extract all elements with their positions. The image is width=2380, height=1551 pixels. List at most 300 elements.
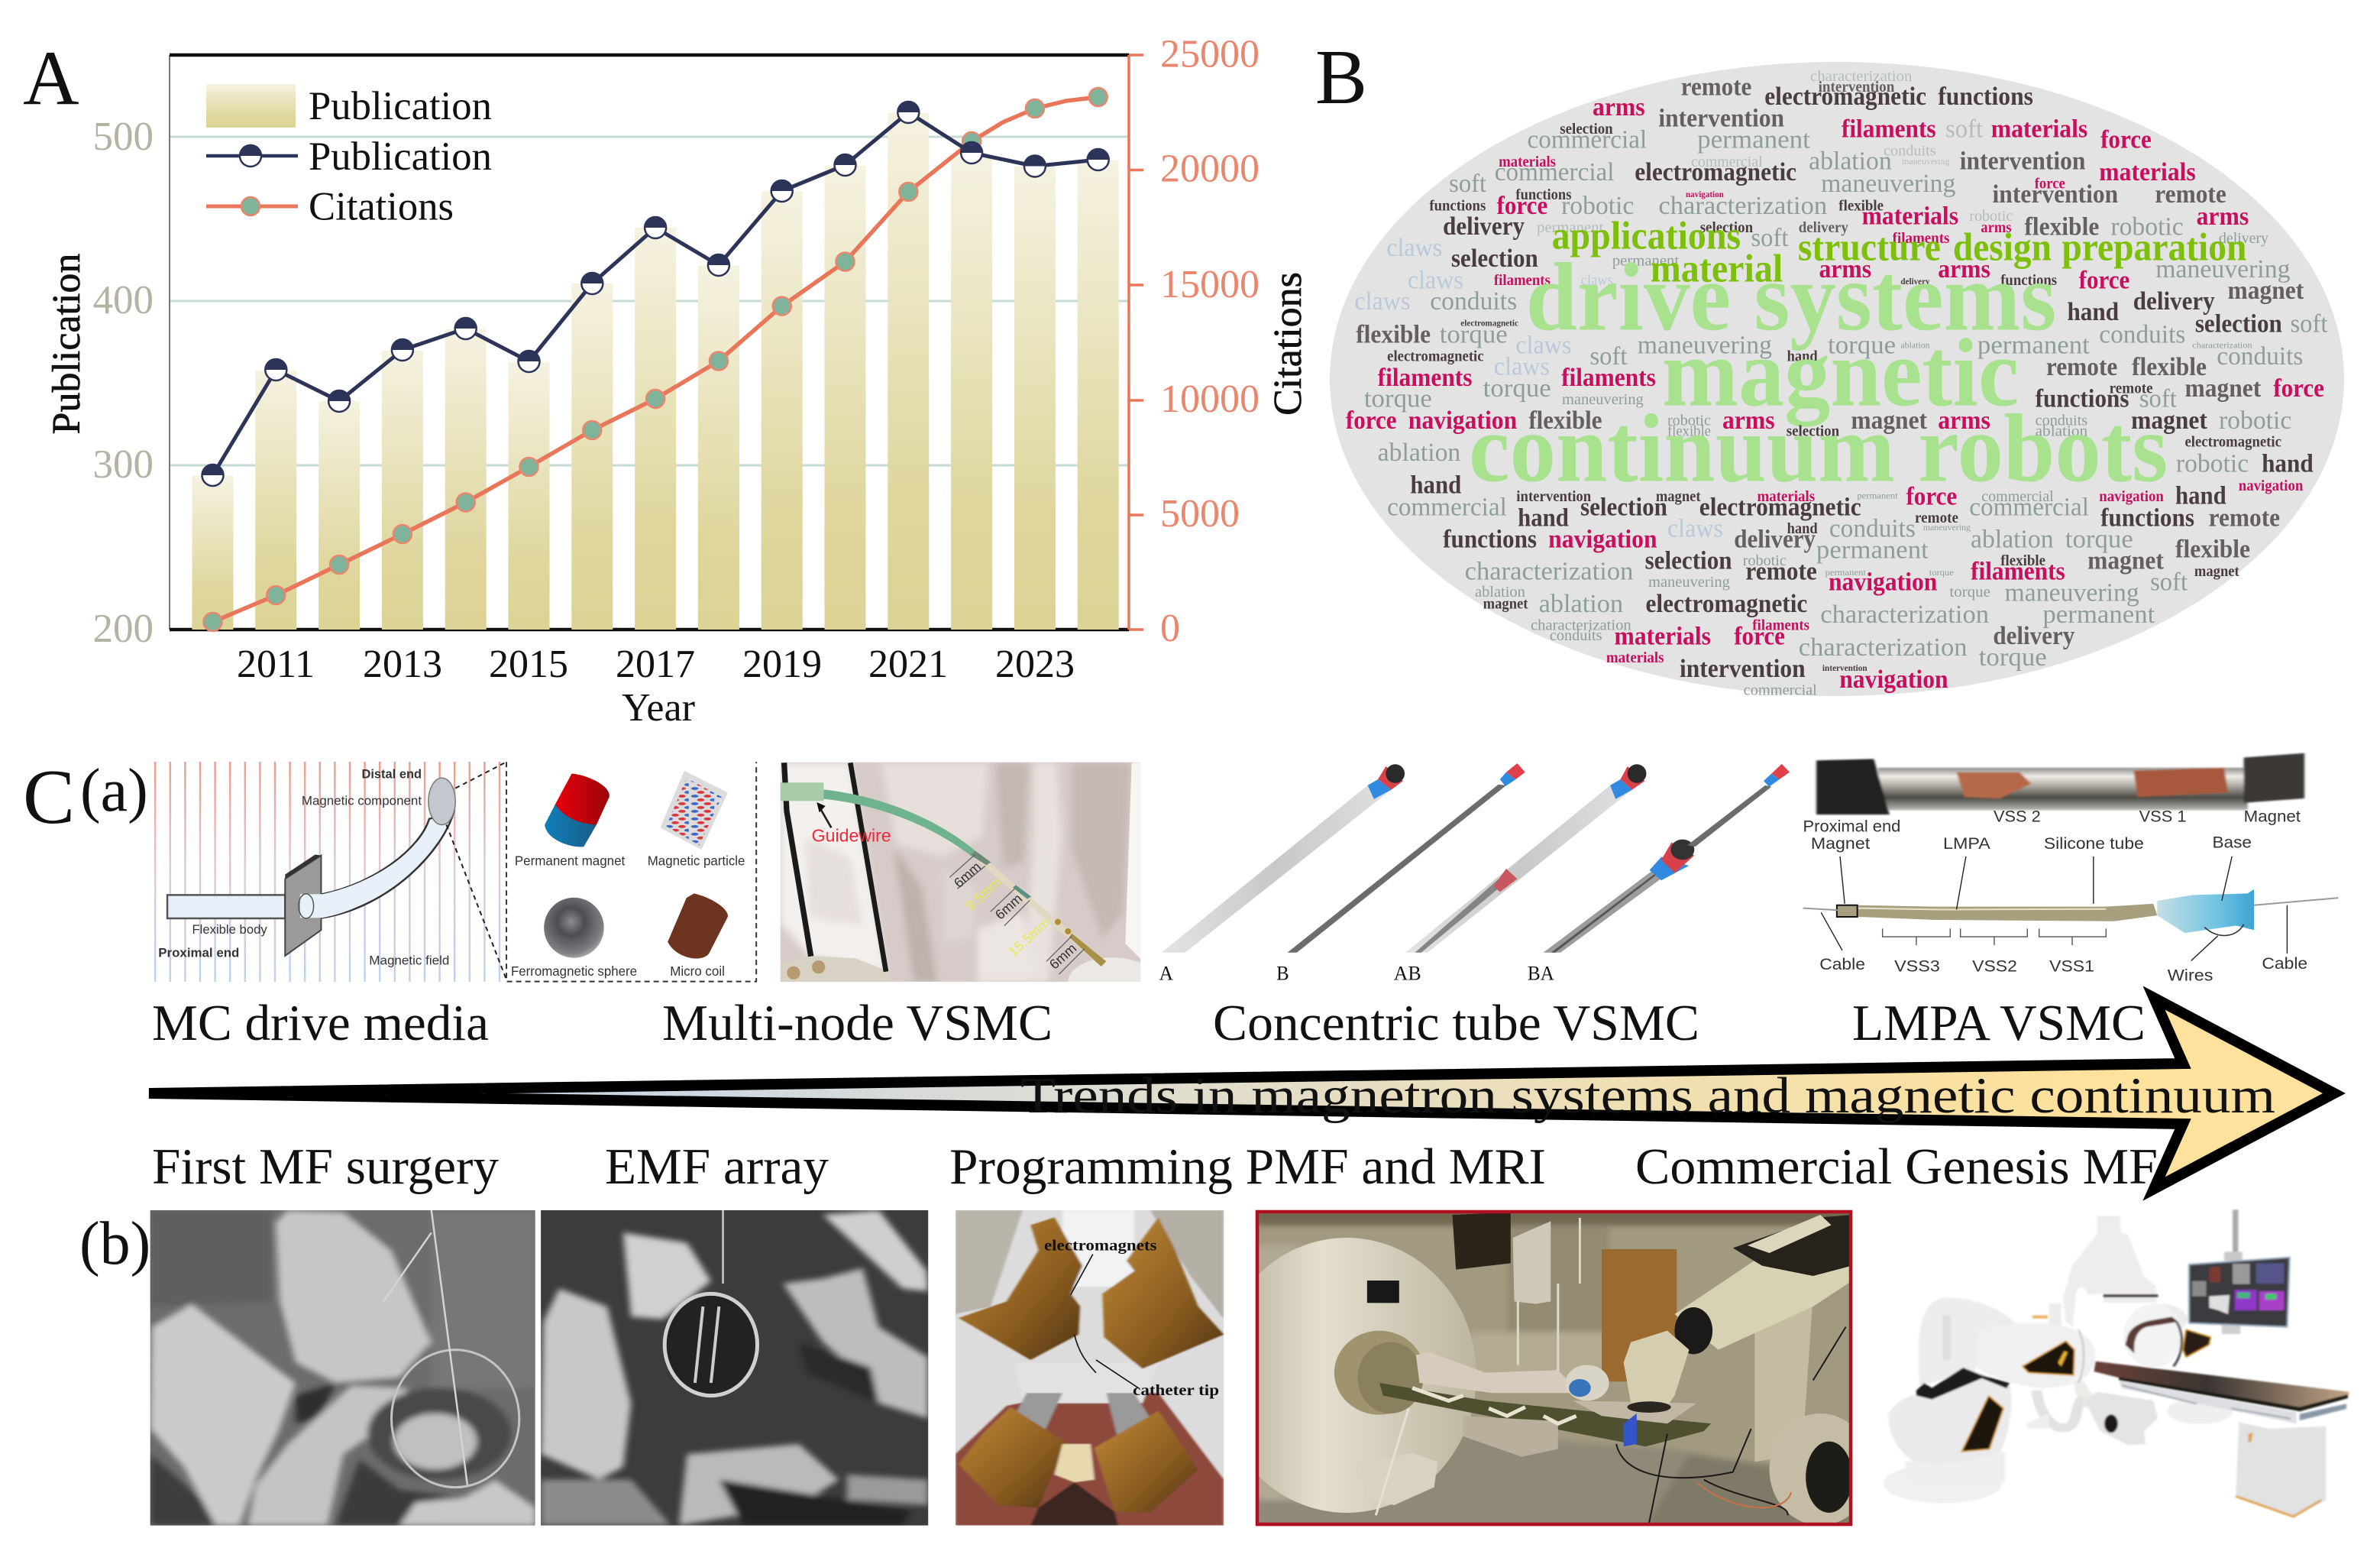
diagram: magnetic continuum drive media: Flexible body (192, 921, 267, 936)
word cloud words: arms (1819, 254, 1871, 283)
x axis year labels: 2023 (995, 643, 1075, 686)
word cloud words: torque (1440, 319, 1508, 348)
line series: citations (203, 88, 1108, 631)
tube B (1288, 763, 1525, 953)
word cloud words: permanent (2042, 600, 2155, 628)
word cloud words: robotic (1743, 552, 1787, 569)
legend (206, 84, 492, 229)
word cloud words: remote (2209, 503, 2280, 532)
word cloud words: functions (1443, 524, 1537, 553)
word cloud words: intervention (1822, 663, 1867, 673)
word cloud words: commercial (1981, 487, 2054, 505)
word cloud words: hand (1410, 470, 1461, 499)
word cloud words: selection (1580, 492, 1667, 521)
word cloud words: robotic (2219, 406, 2291, 435)
word cloud words: robotic (2110, 212, 2184, 241)
inset: magnetic media types: Micro coil (670, 964, 725, 979)
word cloud words: navigation (2099, 487, 2164, 505)
word cloud words: force (2035, 174, 2065, 192)
word cloud words: maneuvering (1562, 390, 1644, 408)
photo: electromagnet array surgery (541, 1210, 928, 1526)
photo and diagram: LMPA variable stiffness catheter: Cable (1819, 955, 1865, 973)
grid lines and axes frame (170, 55, 1129, 630)
word cloud words: maneuvering (1648, 573, 1730, 591)
word cloud words: characterization (1531, 616, 1631, 633)
word cloud words: claws (1408, 265, 1463, 294)
word cloud words: materials (1606, 649, 1664, 666)
word cloud words: claws (1386, 233, 1442, 262)
word cloud words: navigation (1686, 189, 1724, 199)
stage labels: bottom row: Programming PMF and MRI (949, 1138, 1546, 1195)
word cloud words: filaments (1752, 616, 1809, 633)
word cloud words: flexible (1356, 319, 1431, 348)
photo: multi-node guidewire (781, 763, 1141, 982)
word cloud words: selection (1787, 423, 1839, 439)
word cloud words: navigation (1408, 406, 1517, 435)
word cloud words: electromagnetic (2184, 433, 2281, 450)
icon: magnetic particle sheet (660, 771, 728, 850)
word cloud words: navigation (1829, 568, 1938, 596)
panel B: word cloud (1330, 62, 2344, 698)
word cloud words: maneuvering (1902, 157, 1950, 167)
head (1975, 1323, 2096, 1388)
stage labels: bottom row: EMF array (605, 1138, 829, 1195)
word cloud words: robotic (2176, 448, 2249, 478)
word cloud words: delivery (2219, 229, 2268, 247)
photo frame (1257, 1212, 1851, 1524)
bar chart: yearly publications (192, 113, 1119, 630)
word cloud words: magnet (2184, 374, 2261, 403)
word cloud words: materials (1615, 621, 1711, 650)
floor base (1884, 1464, 2002, 1504)
word cloud words: electromagnetic (1635, 157, 1796, 186)
word cloud words: permanent (1816, 535, 1929, 564)
word cloud words: functions (1429, 196, 1486, 214)
photo and diagram: LMPA variable stiffness catheter (1803, 753, 2338, 984)
photo and diagram: LMPA variable stiffness catheter: Magnet (1811, 834, 1870, 853)
photo and diagram: LMPA variable stiffness catheter: VSS 2 (1994, 808, 2041, 826)
drum under table (2167, 1397, 2233, 1424)
word cloud words: hand (2175, 481, 2226, 510)
back ring of left arm (1919, 1297, 2016, 1385)
word cloud words: design (1953, 225, 2052, 269)
monitor (2233, 1209, 2238, 1253)
icon: ferromagnetic sphere (544, 898, 604, 958)
x axis year labels: 2013 (363, 643, 442, 686)
word cloud words: arms (1593, 92, 1645, 121)
legend: Publication (309, 84, 492, 128)
word cloud words: remote (2110, 379, 2153, 397)
photo: LMPA close-up (1816, 753, 2304, 814)
word cloud words: permanent (1697, 125, 1810, 154)
diagram: LMPA catheter with hub (1803, 856, 2338, 960)
word cloud words: conduits (2099, 319, 2185, 348)
word cloud words: torque (1979, 643, 2047, 671)
sub-panel label (b): (b) (79, 1210, 150, 1277)
word cloud words: preparation (2061, 225, 2246, 269)
panel letter B: B (1315, 34, 1367, 121)
word cloud words: permanent (1977, 330, 2090, 359)
x axis year labels: 2015 (489, 643, 568, 686)
pedestal (2236, 1423, 2326, 1517)
y axis title: citations: Citations (1266, 272, 1310, 416)
word cloud words: characterization (1658, 191, 1827, 220)
word cloud words: robotic (1969, 207, 2013, 224)
stage labels: bottom row: First MF surgery (152, 1138, 500, 1195)
right axis: citations (1129, 32, 1260, 650)
word cloud words: claws (1515, 330, 1571, 359)
word cloud words: force (1906, 481, 1957, 510)
word cloud words: selection (1645, 546, 1732, 575)
word cloud words: hand (2262, 448, 2314, 478)
word cloud words: navigation (2239, 477, 2303, 494)
panel letter C: C (23, 754, 75, 840)
word cloud words: maneuvering (1821, 169, 1955, 197)
word cloud words: flexible (1528, 406, 1602, 435)
photo and diagram: LMPA variable stiffness catheter: VSS3 (1894, 957, 1940, 976)
photo: MRI room with robot arm (1217, 1210, 1871, 1526)
left axis tick labels: 500 (93, 115, 154, 159)
word cloud words: intervention (1680, 654, 1806, 683)
legend: Citations (309, 185, 454, 229)
arrow title: Trends in magnetron systems and magnetic continuum (1020, 1067, 2275, 1124)
word cloud words: magnet (2228, 276, 2304, 305)
word cloud words: maneuvering (1923, 523, 1971, 533)
word cloud words: torque (1483, 374, 1551, 403)
word cloud words: conduits (2036, 412, 2087, 429)
word cloud words: remote (1745, 557, 1817, 585)
word cloud words: maneuvering (2005, 578, 2139, 607)
measurement labels on guidewire: 6mm (951, 859, 984, 891)
word cloud words: selection (1700, 219, 1753, 236)
word cloud words: characterization (1799, 633, 1968, 662)
word cloud words: conduits (1829, 513, 1916, 542)
x axis year labels: 2021 (868, 643, 948, 686)
word cloud words: intervention (1819, 78, 1894, 96)
word cloud words: force (1734, 621, 1785, 650)
word cloud words: intervention (1658, 103, 1784, 132)
x axis year labels: 2011 (237, 643, 315, 686)
left axis tick labels: 200 (93, 607, 154, 651)
photo and diagram: LMPA variable stiffness catheter: VSS1 (2049, 957, 2094, 976)
right axis: citations: 25000 (1160, 32, 1260, 76)
photo and diagram: LMPA variable stiffness catheter: LMPA (1943, 834, 1990, 853)
word cloud words: force (2100, 125, 2152, 154)
word cloud words: conduits (2217, 342, 2303, 371)
word cloud words: arms (1938, 406, 1990, 435)
word cloud words: permanent (1537, 219, 1604, 236)
word cloud words: hand (2067, 297, 2119, 326)
right ball (2135, 1304, 2188, 1335)
left axis tick labels (93, 115, 154, 651)
word cloud words: magnetic (1662, 319, 2019, 426)
word cloud words: filaments (1842, 114, 1936, 143)
stage labels: top row: Multi-node VSMC (662, 995, 1053, 1051)
left body (1888, 1370, 2012, 1465)
word cloud words: navigation (1548, 524, 1657, 553)
word cloud words: claws (1667, 513, 1723, 542)
x axis year labels (237, 643, 1075, 686)
table top (2094, 1362, 2349, 1411)
word cloud words: soft (1751, 223, 1789, 252)
word cloud words: ablation (1539, 589, 1623, 617)
word cloud words: ablation (1378, 438, 1460, 467)
word cloud words: soft (2139, 384, 2177, 413)
word cloud words: hand (1787, 347, 1818, 364)
word cloud words: permanent (1857, 491, 1898, 501)
word cloud words: soft (1589, 342, 1628, 371)
word cloud words: torque (1929, 568, 1954, 578)
measurement labels on guidewire: 15.5mm (1005, 915, 1053, 960)
diagram: concentric tubes A, B, AB, BA: BA (1528, 963, 1554, 984)
word cloud words: hand (1787, 520, 1818, 537)
word cloud words: claws (1494, 351, 1550, 380)
measurement labels on guidewire: 9.5mm (962, 874, 1004, 914)
word cloud words: arms (2197, 202, 2249, 231)
stage labels: top row: LMPA VSMC (1852, 995, 2146, 1051)
word cloud words: material (1651, 247, 1783, 290)
word cloud words: permanent (1612, 251, 1680, 269)
word cloud words: claws (1354, 287, 1410, 316)
word cloud words: magnet (2087, 546, 2164, 575)
word cloud words: filaments (1971, 557, 2065, 585)
word cloud words: electromagnetic (1387, 347, 1484, 364)
photo and diagram: LMPA variable stiffness catheter: Proximal end (1803, 818, 1900, 835)
word cloud words: functions (1938, 82, 2033, 110)
tube AB (1405, 764, 1646, 953)
photo and diagram: LMPA variable stiffness catheter: Cable (2262, 954, 2307, 973)
label: guidewire: Guidewire (812, 826, 891, 846)
word cloud words: navigation (1839, 665, 1948, 694)
photo: Genesis MF system (1884, 1209, 2349, 1517)
diagram: magnetic continuum drive media: Magnetic field (369, 953, 449, 967)
word cloud words: materials (1862, 201, 1958, 230)
word cloud words: filaments (1561, 363, 1656, 392)
word cloud words: torque (1828, 330, 1896, 359)
measurement labels on guidewire: 6mm (992, 891, 1025, 922)
stage labels: bottom row (152, 1138, 2158, 1195)
word cloud words: remote (1915, 509, 1958, 526)
photo: electromagnet coil array: electromagnets (1044, 1237, 1156, 1254)
word cloud words: remote (2046, 352, 2117, 381)
diagram: concentric tubes A, B, AB, BA: B (1276, 963, 1289, 984)
word cloud words: soft (1449, 169, 1487, 197)
right axis: citations: 0 (1160, 607, 1180, 650)
word cloud words: commercial (1495, 157, 1615, 186)
word cloud words: materials (1499, 153, 1556, 170)
word cloud words: conduits (1884, 142, 1936, 159)
word cloud words: magnet (1851, 406, 1927, 435)
photo and diagram: LMPA variable stiffness catheter: Base (2212, 834, 2252, 851)
word cloud words: flexible (1838, 196, 1884, 214)
tube BA (1543, 764, 1790, 953)
legend: Publication (309, 134, 492, 179)
stage labels: top row: Concentric tube VSMC (1213, 995, 1699, 1051)
diagram: magnetic continuum drive media: Distal end (361, 766, 422, 781)
word cloud words: ablation (1809, 146, 1892, 175)
word cloud words: ablation (1900, 341, 1930, 351)
word cloud words: soft (2150, 568, 2188, 596)
left axis tick labels: 300 (93, 442, 154, 487)
word cloud words (1346, 67, 2328, 698)
word cloud ellipse background (1330, 62, 2344, 696)
word cloud words: arms (1722, 406, 1775, 435)
word cloud words: magnet (2131, 406, 2207, 435)
word cloud words: materials (1991, 114, 2087, 143)
word cloud words: force (1496, 191, 1547, 220)
word cloud words: intervention (1960, 146, 2086, 175)
word cloud words: hand (1518, 503, 1569, 532)
word cloud words: electromagnetic (1764, 82, 1926, 110)
inset: magnetic media types: Permanent magnet (515, 853, 625, 868)
icon: permanent magnet (545, 774, 610, 847)
word cloud words: commercial (1528, 125, 1647, 154)
word cloud words: selection (1451, 244, 1538, 273)
word cloud words: magnet (1483, 594, 1528, 612)
word cloud words: filaments (1494, 271, 1551, 289)
word cloud words: functions (2100, 503, 2194, 532)
word cloud words: intervention (1993, 180, 2118, 208)
word cloud words: flexible (2000, 552, 2045, 569)
tube A (1162, 764, 1405, 953)
word cloud words: arms (1981, 219, 2011, 236)
word cloud words: ablation (1475, 583, 1525, 601)
word cloud words: commercial (1691, 153, 1763, 170)
word cloud words: characterization (1810, 67, 1912, 85)
diagram: concentric tubes A, B, AB, BA: AB (1394, 963, 1421, 984)
word cloud words: conduits (1550, 627, 1602, 643)
y axis title: publication: Publication (45, 254, 89, 434)
diagram: concentric tubes A, B, AB, BA: A (1159, 963, 1173, 984)
word cloud words: soft (1945, 114, 1983, 143)
photo and diagram: LMPA variable stiffness catheter: VSS 1 (2139, 808, 2186, 826)
center unit (2084, 1392, 2158, 1446)
word cloud words: remote (2155, 180, 2226, 208)
photo: first magnetic surgery (150, 1210, 535, 1526)
word cloud words: maneuvering (1638, 330, 1772, 359)
word cloud words: commercial (1387, 492, 1507, 521)
line series: publications (202, 102, 1109, 486)
word cloud words: flexible (1667, 423, 1711, 439)
word cloud words: force (2273, 374, 2324, 403)
word cloud words: permanent (1825, 568, 1866, 578)
word cloud words: characterization (1820, 600, 1989, 628)
word cloud words: claws (1581, 271, 1613, 289)
inset: magnetic media types: Ferromagnetic sphere (511, 964, 637, 979)
word cloud words: selection (2195, 309, 2282, 338)
word cloud words: intervention (1516, 487, 1591, 505)
word cloud words: delivery (1993, 621, 2074, 649)
word cloud words: torque (1949, 583, 1990, 601)
right axis: citations: 10000 (1160, 377, 1260, 421)
panel A: publication and citation chart (23, 32, 1310, 730)
right axis: citations: 5000 (1160, 492, 1240, 536)
hose (2036, 1391, 2083, 1428)
word cloud words: structure (1798, 225, 1941, 269)
word cloud words: filaments (1893, 229, 1949, 247)
x axis year labels: 2017 (616, 643, 695, 686)
measurement labels on guidewire: 6mm (1046, 941, 1079, 972)
magnetic field background lines (153, 762, 506, 982)
measurement labels on guidewire (951, 859, 1079, 972)
word cloud words: electromagnetic (1699, 492, 1861, 521)
word cloud words: delivery (1734, 524, 1816, 553)
word cloud words: electromagnetic (1460, 319, 1518, 328)
word cloud words: delivery (1799, 219, 1848, 236)
word cloud words: robotic (1667, 412, 1711, 429)
word cloud words: torque (2065, 524, 2133, 553)
word cloud words: functions (2000, 271, 2057, 289)
word cloud words: electromagnetic (1645, 589, 1807, 617)
photo: electromagnet coil array (956, 1210, 1224, 1526)
word cloud words: applications (1552, 213, 1741, 257)
diagram: magnetic continuum drive media (158, 762, 756, 982)
diagram: concentric tubes A, B, AB, BA (1159, 763, 1790, 984)
word cloud words: filaments (1378, 363, 1472, 392)
sub-panel label (a): (a) (80, 757, 148, 824)
word cloud words: magnet (1656, 487, 1701, 505)
word cloud words: functions (1515, 186, 1571, 202)
right axis: citations: 20000 (1160, 147, 1260, 191)
word cloud words: delivery (1443, 212, 1525, 240)
word cloud words: commercial (1744, 682, 1817, 698)
word cloud words: soft (2290, 309, 2328, 338)
word cloud words: delivery (1900, 277, 1930, 287)
word cloud words: conduits (1430, 287, 1517, 316)
inset: magnetic media types (511, 771, 745, 979)
word cloud words: magnet (2194, 562, 2239, 580)
photo and diagram: LMPA variable stiffness catheter: Silicone tube (2044, 834, 2144, 853)
diagram: magnetic continuum drive media: Proximal end (158, 945, 239, 960)
word cloud words: flexible (2175, 534, 2250, 563)
left axis tick labels: 400 (93, 278, 154, 322)
stage labels: top row (152, 995, 2146, 1051)
word cloud words: characterization (1465, 557, 1633, 585)
word cloud words: delivery (2133, 287, 2215, 316)
arrow: trend arrow (149, 998, 2334, 1189)
word cloud words: remote (1681, 72, 1751, 101)
word cloud words: commercial (1969, 492, 2089, 521)
text: Magnetic particle (648, 853, 745, 868)
word cloud words: selection (1560, 120, 1613, 138)
word cloud words: force (1346, 406, 1397, 435)
photo and diagram: LMPA variable stiffness catheter: Wires (2168, 967, 2213, 984)
stage labels: bottom row: Commercial Genesis MF (1635, 1138, 2158, 1195)
panel letter A: A (23, 35, 79, 121)
word cloud words: ablation (2036, 423, 2087, 439)
x axis title: Year (622, 686, 695, 730)
stage labels: top row: MC drive media (152, 995, 489, 1051)
x axis year labels: 2019 (742, 643, 822, 686)
word cloud words: force (2079, 265, 2129, 294)
word cloud words: flexible (2024, 212, 2099, 241)
word cloud words: materials (2099, 157, 2196, 186)
text: catheter tip (1133, 1382, 1219, 1399)
icon: micro coil (668, 893, 728, 959)
word cloud words: robotic (1561, 191, 1634, 220)
word cloud words: characterization (2192, 341, 2252, 351)
word cloud words: ablation (1971, 524, 2054, 553)
word cloud words: torque (1364, 384, 1432, 413)
diagram: magnetic continuum drive media: Magnetic component (302, 793, 422, 808)
photo and diagram: LMPA variable stiffness catheter: VSS2 (1972, 957, 2017, 976)
C-arm stand (2063, 1216, 2156, 1327)
word cloud words: maneuvering (2155, 254, 2290, 283)
word cloud words: materials (1757, 487, 1815, 505)
right axis: citations: 15000 (1160, 263, 1260, 306)
word cloud words: flexible (2132, 352, 2207, 381)
word cloud words: arms (1938, 254, 1990, 283)
